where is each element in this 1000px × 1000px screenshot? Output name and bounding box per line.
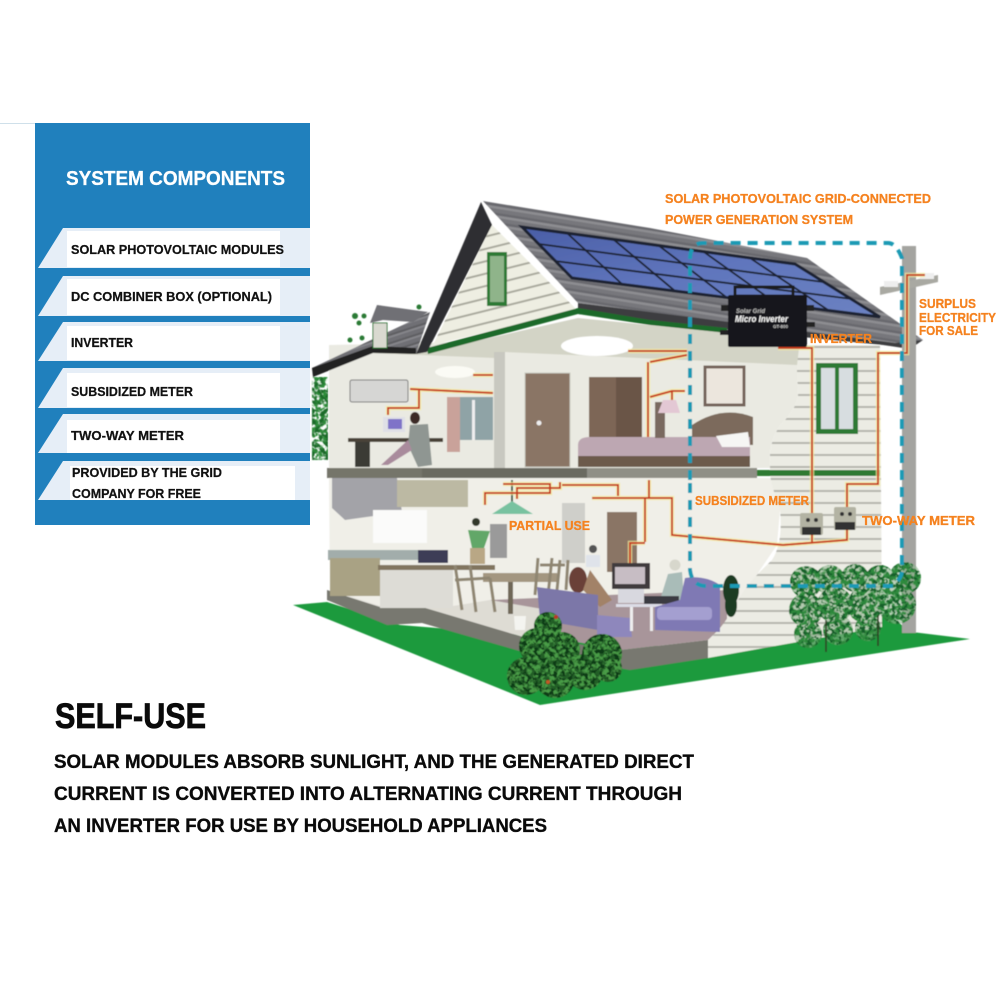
man on sofa xyxy=(644,560,684,604)
panel: system components xyxy=(35,123,310,525)
woman and sofa back xyxy=(569,545,612,607)
glass table xyxy=(616,604,662,631)
illustration: house cutaway xyxy=(293,201,970,705)
room divider xyxy=(494,352,505,468)
label: subsidized meter: SUBSIDIZED METER xyxy=(695,493,810,508)
right bushes xyxy=(789,562,921,652)
doorway xyxy=(607,512,637,572)
micro inverter: Solar Grid xyxy=(736,309,765,315)
window left room xyxy=(447,397,493,452)
label: grid-connected system xyxy=(665,191,931,227)
list row: solar photovoltaic modules: SOLAR PHOTOVOLTAIC MODULES xyxy=(71,242,284,257)
list row: subsidized meter xyxy=(38,368,310,408)
heading: self-use: SELF-USE xyxy=(55,697,206,736)
label: grid-connected system: SOLAR PHOTOVOLTAIC GRID-CONNECTED xyxy=(665,191,931,206)
label: grid-connected system: POWER GENERATION SYSTEM xyxy=(665,212,853,227)
siding window xyxy=(816,363,858,434)
solar panel array xyxy=(522,227,880,317)
dormer xyxy=(370,305,428,348)
list row: provided by the grid company xyxy=(38,461,310,501)
list row: provided by the grid company: COMPANY FOR FREE xyxy=(72,486,201,501)
lower left roof xyxy=(312,312,430,376)
dining table and chairs xyxy=(455,558,568,614)
description text: CURRENT IS CONVERTED INTO ALTERNATING CURRENT THROUGH xyxy=(54,784,682,805)
potted plant xyxy=(723,575,739,617)
vine behind dormer xyxy=(348,304,422,342)
list row: two-way meter xyxy=(38,414,310,453)
siding green band xyxy=(757,470,880,476)
micro inverter: Micro Inverter xyxy=(735,314,789,325)
heading: system components: SYSTEM COMPONENTS xyxy=(66,168,285,190)
top hairline xyxy=(0,123,35,124)
purple sofa left xyxy=(537,587,632,637)
label: surplus electricity: SURPLUS xyxy=(919,296,976,311)
wardrobe xyxy=(589,377,642,437)
upper floor walls xyxy=(329,335,798,468)
lower floor walls xyxy=(329,478,790,648)
ac unit xyxy=(350,380,408,402)
label: two-way meter: TWO-WAY METER xyxy=(862,513,976,528)
lower floor carpet xyxy=(490,590,727,650)
kitchen floor xyxy=(330,590,560,637)
right siding xyxy=(708,345,882,658)
kitchen cabinets xyxy=(397,480,468,507)
label: surplus electricity: FOR SALE xyxy=(919,323,978,338)
system boundary dashed line xyxy=(690,243,902,586)
gable barge board xyxy=(416,202,492,354)
list row: two-way meter: TWO-WAY METER xyxy=(71,428,185,443)
bedside lamp xyxy=(655,400,680,438)
left bush xyxy=(507,612,622,698)
lower left roof edge xyxy=(312,346,416,377)
kitchen window xyxy=(373,510,427,543)
utility pole xyxy=(880,246,938,633)
lawn xyxy=(293,602,970,705)
kitchen counter xyxy=(328,550,495,608)
list row: subsidized meter: SUBSIDIZED METER xyxy=(71,384,194,399)
foundation xyxy=(327,590,708,670)
micro inverter xyxy=(720,287,815,347)
main roof xyxy=(483,201,923,345)
ceiling lamps xyxy=(435,336,633,378)
list row: dc combiner box xyxy=(38,276,310,316)
wall picture xyxy=(705,367,744,405)
purple sofa right xyxy=(655,577,720,632)
list row: inverter xyxy=(38,322,310,361)
gable vent xyxy=(487,252,507,306)
list row: inverter: INVERTER xyxy=(71,335,134,350)
gable wall xyxy=(433,225,577,345)
roof eave xyxy=(578,303,923,349)
description text: SOLAR MODULES ABSORB SUNLIGHT, AND THE GENERATED DIRECT xyxy=(54,752,694,773)
green pendant lamp xyxy=(492,480,533,514)
description text: AN INVERTER FOR USE BY HOUSEHOLD APPLIANCES xyxy=(54,816,547,837)
ivy left wall xyxy=(312,377,328,460)
planter xyxy=(514,616,526,630)
green fascia xyxy=(427,308,727,354)
desk with computer and person xyxy=(348,412,443,467)
label: inverter: INVERTER xyxy=(810,331,873,346)
list row: solar photovoltaic modules xyxy=(38,228,310,268)
tv xyxy=(612,563,650,603)
range hood xyxy=(332,478,402,520)
list row: dc combiner box: DC COMBINER BOX (OPTIONAL) xyxy=(71,289,272,304)
fridge xyxy=(490,524,507,558)
wiring xyxy=(388,275,925,563)
micro inverter: GT-800 xyxy=(773,324,789,329)
floor slab xyxy=(327,468,757,478)
description text xyxy=(54,752,694,837)
bed xyxy=(578,412,753,467)
wall column xyxy=(562,503,585,563)
list row: provided by the grid company: PROVIDED BY THE GRID xyxy=(72,465,222,480)
label: partial use: PARTIAL USE xyxy=(509,518,590,533)
bedroom door xyxy=(525,373,570,467)
woman in kitchen xyxy=(468,518,490,564)
label: surplus electricity xyxy=(919,296,996,338)
meters xyxy=(800,507,856,535)
upper ceiling xyxy=(345,318,800,365)
